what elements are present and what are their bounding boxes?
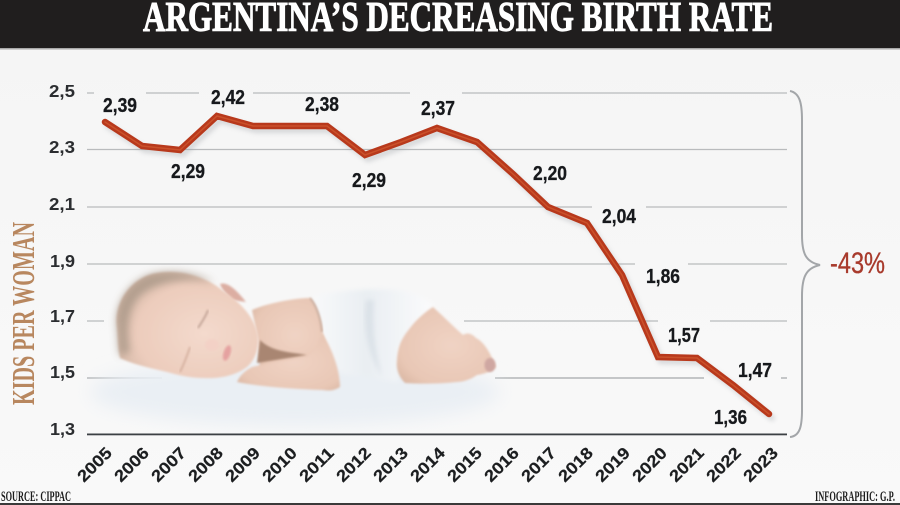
nose (205, 339, 219, 351)
mouth (221, 344, 233, 362)
source note: SOURCE: CIPPAC (1, 489, 71, 505)
data value labels: 1,36 (714, 407, 747, 429)
y axis labels: 2,1 (49, 194, 75, 214)
x axis year labels: 2023 (740, 444, 782, 486)
y axis labels: 1,7 (50, 306, 75, 326)
x axis year labels: 2016 (481, 444, 523, 486)
line shadow (108, 120, 772, 418)
data value labels: 2,29 (171, 161, 205, 183)
gridlines (87, 93, 787, 378)
eye (198, 310, 208, 328)
data value labels: 2,04 (602, 206, 637, 228)
shoulder edge (310, 298, 322, 332)
data value labels: 1,47 (738, 360, 772, 382)
data value labels: 1,57 (668, 325, 700, 347)
head (117, 272, 258, 378)
y axis title: KIDS PER WOMAN (5, 222, 41, 405)
percent change callout: -43% (830, 247, 885, 280)
x axis year labels: 2011 (296, 444, 338, 486)
y axis labels (49, 81, 75, 439)
x axis year labels: 2022 (703, 444, 745, 486)
mattress (90, 358, 500, 426)
x axis year labels: 2014 (407, 443, 449, 486)
title bar (0, 0, 900, 50)
data value labels: 2,42 (211, 87, 245, 109)
x axis year labels: 2008 (185, 444, 227, 486)
data value labels: 1,86 (646, 266, 680, 288)
hair (117, 272, 214, 356)
y axis labels: 1,9 (50, 251, 75, 271)
legs (397, 307, 496, 384)
x axis year labels: 2021 (666, 444, 708, 486)
x axis year labels: 2020 (629, 444, 671, 486)
y axis labels: 1,3 (50, 419, 75, 439)
x axis year labels: 2009 (222, 444, 264, 486)
cheek crease (180, 347, 190, 372)
arm (237, 333, 340, 391)
foot tip (484, 358, 496, 372)
data value labels: 2,38 (305, 94, 339, 116)
bottom rule (0, 503, 900, 505)
x axis year labels: 2012 (333, 444, 375, 486)
data value labels: 2,29 (352, 170, 386, 192)
blanket fold (365, 300, 382, 376)
x axis year labels: 2007 (148, 444, 190, 486)
bracket (790, 91, 820, 437)
x axis year labels: 2018 (555, 444, 597, 486)
baseline (87, 434, 787, 435)
x axis year labels (74, 443, 782, 486)
arm shadow (257, 340, 307, 363)
x axis year labels: 2017 (518, 444, 560, 486)
x axis year labels: 2015 (444, 444, 486, 486)
shoulder (252, 298, 330, 372)
x axis year labels: 2013 (370, 444, 412, 486)
blanket (313, 289, 433, 382)
line chart (105, 116, 772, 418)
y axis labels: 2,5 (49, 81, 75, 101)
x axis year labels: 2005 (74, 444, 116, 486)
red line (105, 116, 769, 414)
x axis year labels: 2019 (592, 444, 634, 486)
y axis labels: 2,3 (49, 137, 75, 157)
data value labels: 2,39 (103, 95, 137, 117)
data value labels: 2,20 (533, 163, 567, 185)
data value labels: 2,37 (421, 98, 455, 120)
baby photo (90, 272, 500, 426)
ear (220, 283, 246, 302)
x axis year labels: 2010 (259, 444, 301, 486)
line highlight (105, 116, 769, 414)
y axis labels: 1,5 (50, 362, 75, 382)
x axis year labels: 2006 (111, 444, 153, 486)
data value labels (103, 87, 772, 429)
